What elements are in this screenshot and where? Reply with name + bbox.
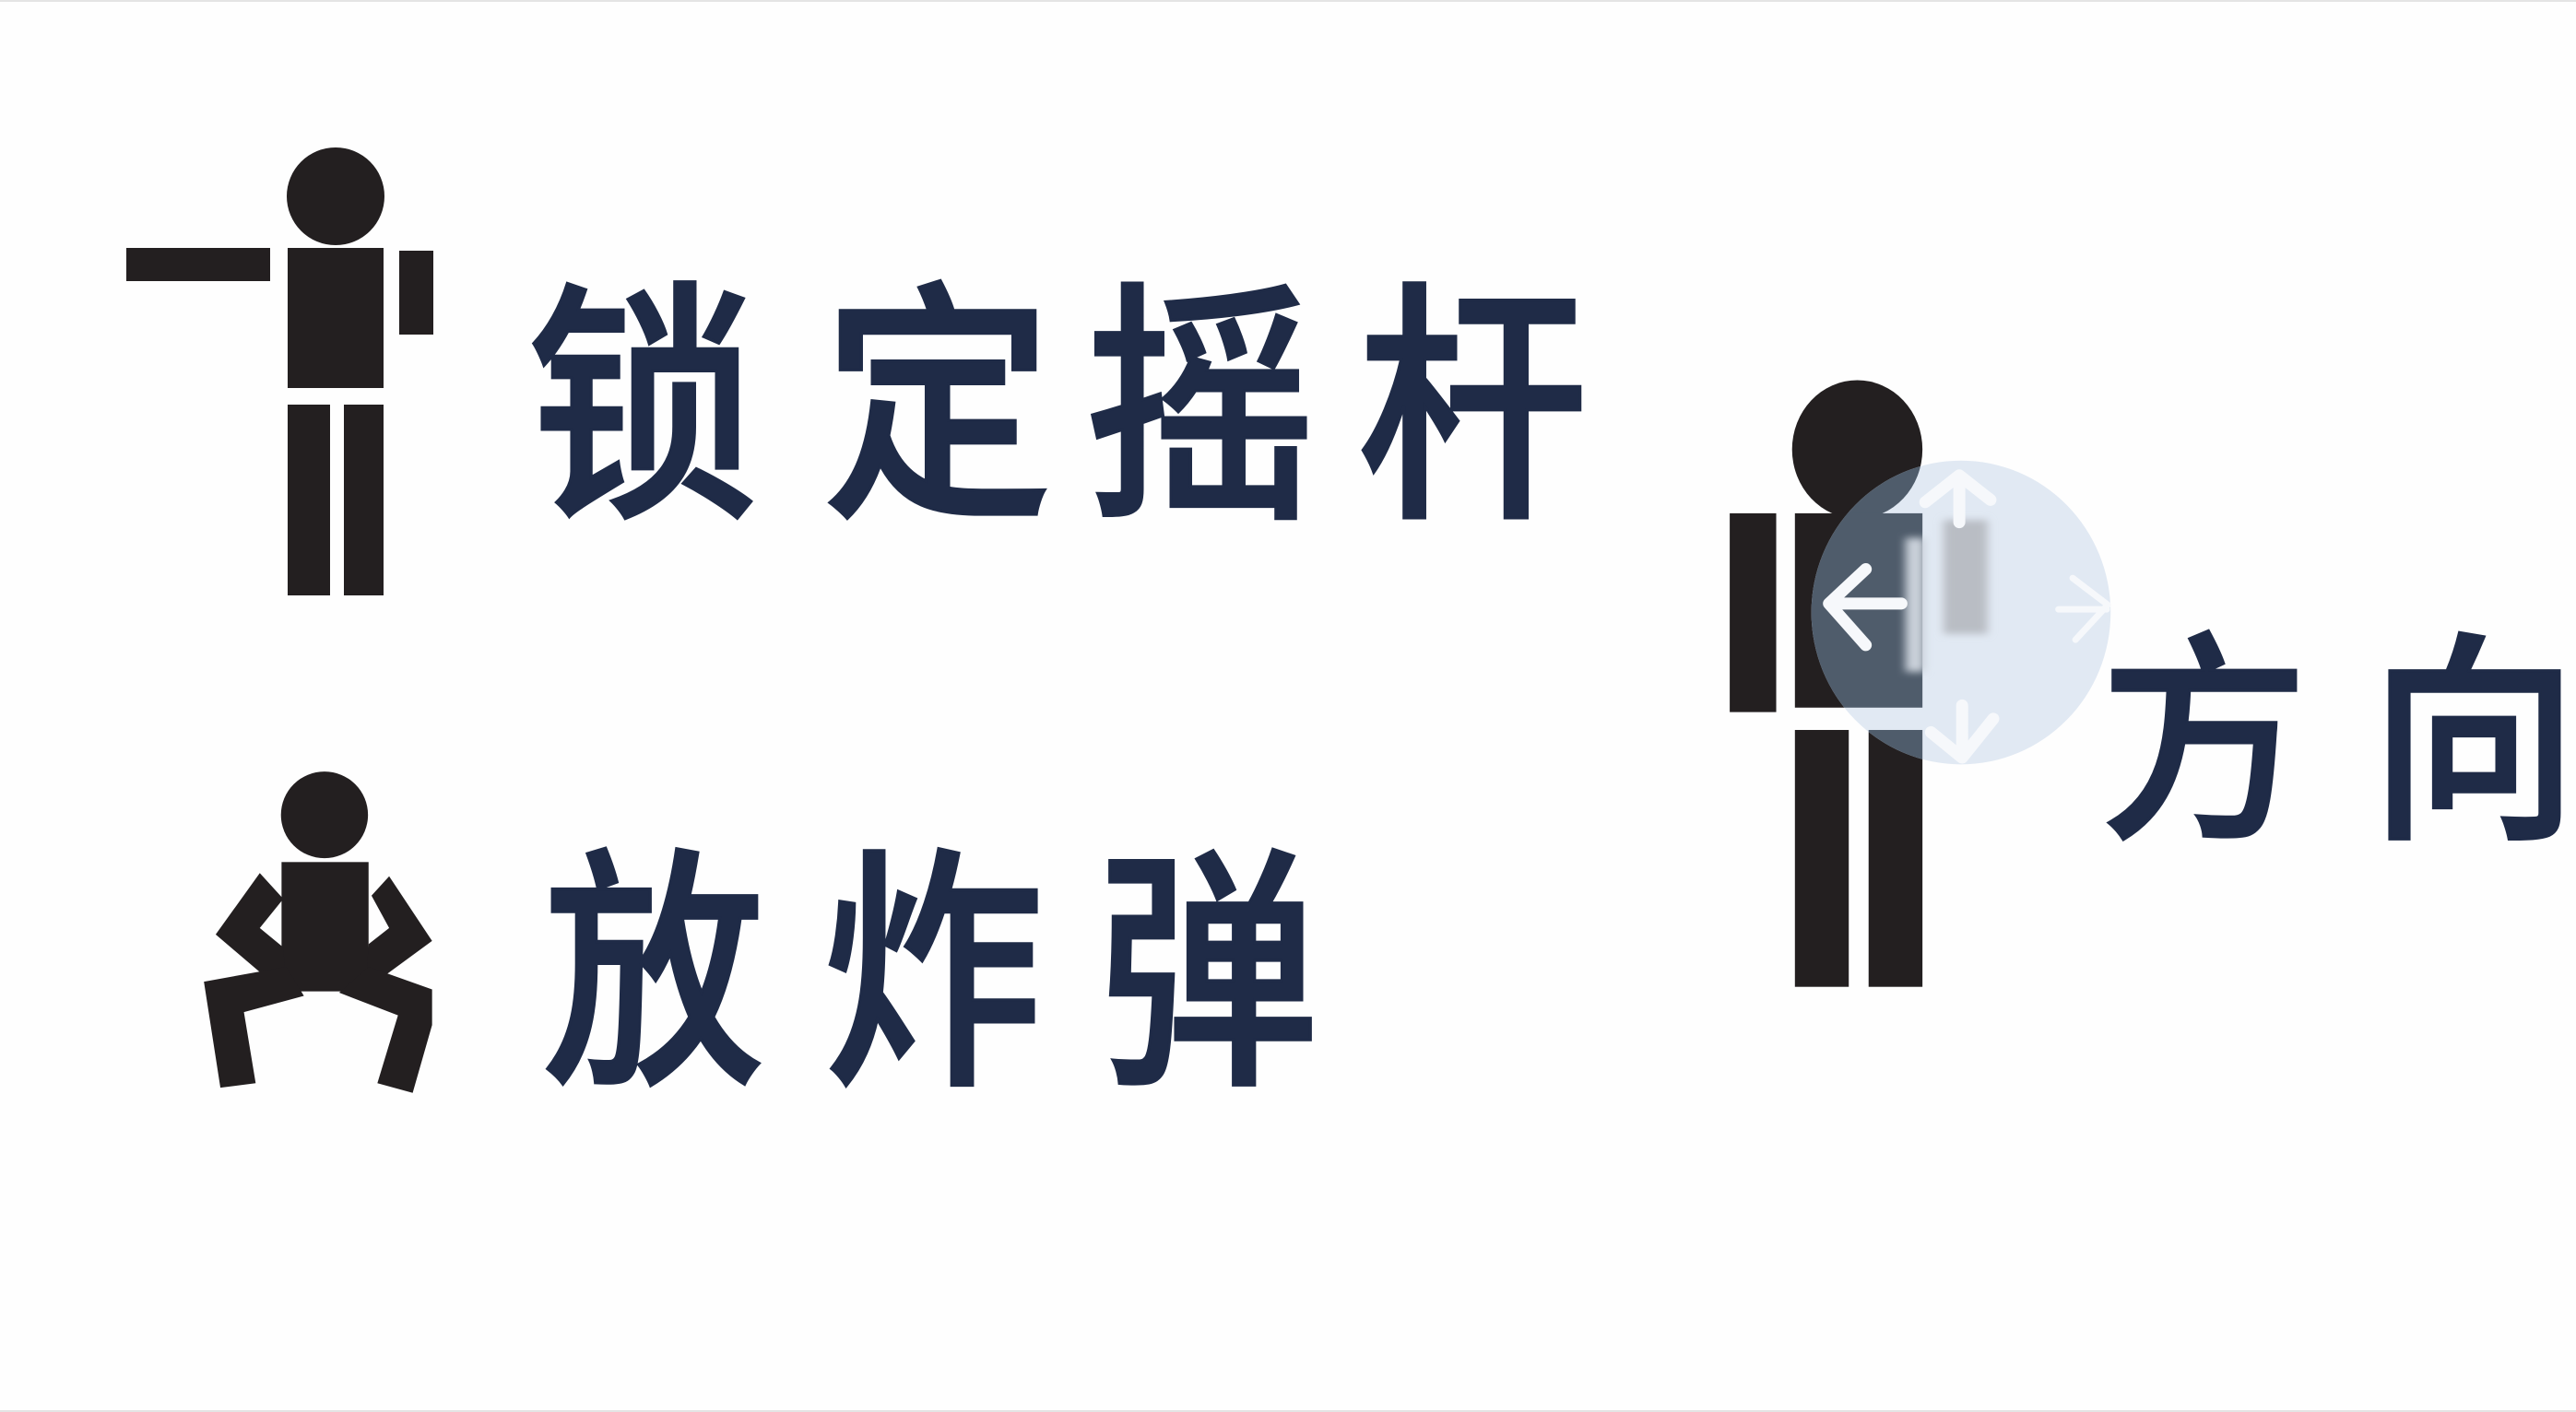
figure body	[1730, 380, 1922, 987]
label: lock joystick: 锁定摇杆	[527, 267, 1588, 551]
arrows	[1829, 476, 2108, 758]
label: drop bomb: 放炸弹	[543, 833, 1318, 1118]
icon: squatting figure (drop bomb)	[204, 771, 432, 1093]
icon: figure pointing left (lock joystick)	[126, 147, 433, 595]
icon: standing figure with direction pad	[1730, 380, 2110, 987]
label: direction: 方向	[2100, 620, 2576, 868]
direction pad circle	[1811, 461, 2111, 765]
